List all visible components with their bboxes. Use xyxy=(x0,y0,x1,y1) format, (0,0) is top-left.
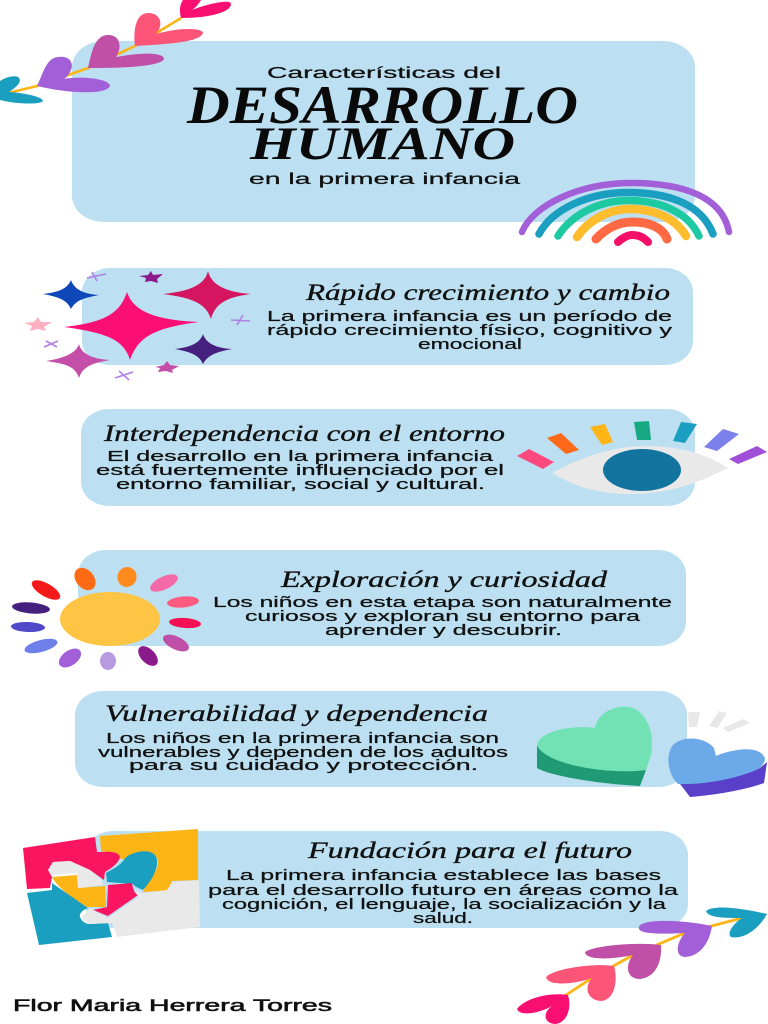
body text: para su cuidado y protección. xyxy=(129,758,478,774)
body text: Los niños en la primera infancia son xyxy=(106,731,499,747)
icon: sparkles xyxy=(24,271,251,380)
body text: para el desarrollo futuro en áreas como la xyxy=(208,883,680,899)
title xyxy=(186,65,578,188)
body text: emocional xyxy=(418,337,522,353)
panel: rápido crecimiento xyxy=(24,268,693,380)
icon: top heart branch xyxy=(0,0,231,104)
body text: Los niños en esta etapa son naturalmente xyxy=(213,595,672,611)
body text xyxy=(267,309,673,353)
body text xyxy=(213,595,672,639)
body text: rápido crecimiento físico, cognitivo y xyxy=(267,323,673,339)
body text: curiosos y exploran su entorno para xyxy=(245,609,642,625)
body text: La primera infancia es un período de xyxy=(267,309,672,325)
body text: está fuertemente influenciado por el xyxy=(96,463,504,479)
heading: Vulnerabilidad y dependencia xyxy=(105,701,488,726)
body text: entorno familiar, social y cultural. xyxy=(116,477,485,493)
card background xyxy=(78,550,686,646)
heading: Exploración y curiosidad xyxy=(280,567,608,592)
author credit: Flor Maria Herrera Torres xyxy=(13,997,332,1015)
body text: cognición, el lenguaje, la socialización y la xyxy=(222,897,668,913)
panel: header xyxy=(72,41,729,242)
panel: interdependencia xyxy=(81,409,767,506)
body text: aprender y descubrir. xyxy=(325,623,562,639)
body text xyxy=(98,731,508,774)
title subline: en la primera infancia xyxy=(249,171,520,188)
card background xyxy=(75,691,687,787)
icon: sun xyxy=(11,564,201,671)
card background xyxy=(81,409,695,506)
panel: fundación xyxy=(23,829,688,945)
title intro: Características del xyxy=(267,65,501,82)
panel: vulnerabilidad xyxy=(75,691,767,797)
icon: hearts xyxy=(537,707,767,797)
body text: La primera infancia establece las bases xyxy=(226,868,661,884)
icon: rainbow xyxy=(522,183,729,242)
card background xyxy=(85,831,688,928)
title main line 2: HUMANO xyxy=(249,118,515,170)
body text xyxy=(96,449,504,493)
body text: El desarrollo en la primera infancia xyxy=(107,449,495,465)
heading: Interdependencia con el entorno xyxy=(103,421,505,446)
heading: Rápido crecimiento y cambio xyxy=(305,280,670,305)
body text xyxy=(208,868,680,927)
icon: bottom heart branch xyxy=(517,908,767,1024)
heading: Fundación para el futuro xyxy=(307,838,632,863)
card background xyxy=(82,268,693,365)
body text: vulnerables y dependen de los adultos xyxy=(98,745,508,761)
title main line 1: DESARROLLO xyxy=(186,75,578,135)
header background xyxy=(72,41,695,222)
panel: exploración xyxy=(11,550,686,671)
icon: puzzle xyxy=(23,829,200,945)
icon: eye xyxy=(517,421,767,494)
body text: salud. xyxy=(413,911,473,927)
